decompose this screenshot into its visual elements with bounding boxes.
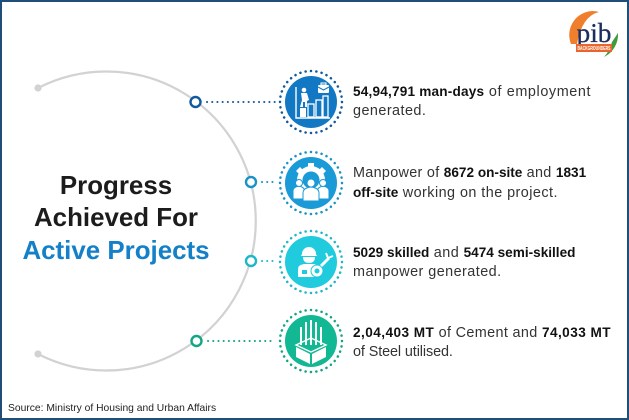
text block 1 xyxy=(353,84,591,119)
text block 1: generated. xyxy=(353,103,426,119)
title: Achieved For xyxy=(34,204,198,232)
icon: manpower gear and people xyxy=(280,152,342,214)
icon: cement block and steel rods xyxy=(280,310,342,372)
text block 2: Manpower of 8672 on-site and 1831 xyxy=(353,165,586,181)
title xyxy=(22,172,210,264)
icon: employment growth chart xyxy=(280,71,342,133)
text block 4 xyxy=(353,325,611,360)
logo: PIB backgrounders xyxy=(568,9,618,59)
text block 4: of Steel utilised. xyxy=(353,344,453,360)
text block 3: 5029 skilled and 5474 semi-skilled xyxy=(353,245,575,261)
text block 2 xyxy=(353,165,586,201)
icon: skilled worker with gear and wrench xyxy=(280,231,342,293)
text block 3 xyxy=(353,245,575,280)
logo: PIB backgrounders: BACKGROUNDERS xyxy=(578,46,611,52)
title: Progress xyxy=(60,172,172,200)
curved arc xyxy=(34,72,256,370)
text block 4: 2,04,403 MT of Cement and 74,033 MT xyxy=(353,325,611,341)
title: Active Projects xyxy=(22,236,210,264)
connector 4 xyxy=(192,336,275,346)
text block 3: manpower generated. xyxy=(353,264,502,280)
logo: PIB backgrounders: pib xyxy=(576,18,612,48)
connector 2 xyxy=(246,177,275,187)
text block 2: off-site working on the project. xyxy=(353,185,558,201)
connector 3 xyxy=(246,256,275,266)
text block 1: 54,94,791 man-days of employment xyxy=(353,84,591,100)
connector 1 xyxy=(190,97,275,107)
source note: Source: Ministry of Housing and Urban Affairs xyxy=(8,403,216,414)
